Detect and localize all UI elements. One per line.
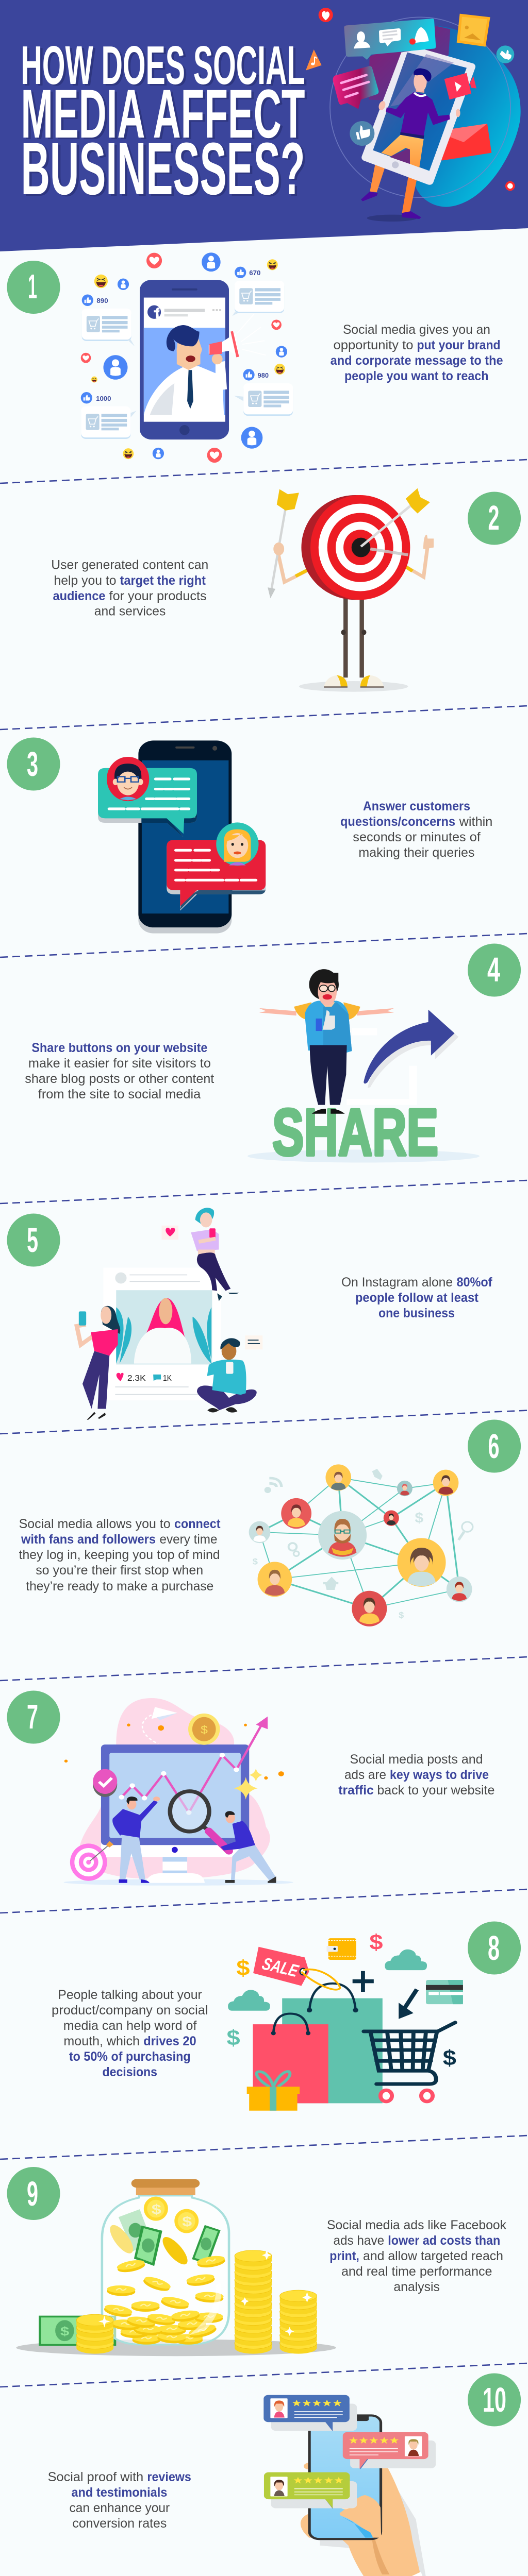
text block 3: making their queries bbox=[358, 845, 474, 860]
illustration: phone with megaphone man and social reactions: 1000 bbox=[96, 395, 111, 402]
text block 7 bbox=[338, 1752, 494, 1798]
text block 1: opportunity to bbox=[333, 338, 414, 352]
text block 10: reviews bbox=[147, 2470, 191, 2484]
panel: step 4 bbox=[25, 944, 521, 1170]
number badge 4 bbox=[468, 944, 521, 996]
illustration: phone with megaphone man and social reactions: 670 bbox=[249, 269, 261, 277]
text block 9: print, bbox=[329, 2249, 359, 2263]
panel: step 5 bbox=[7, 1208, 492, 1420]
text block 4: share blog posts or other content bbox=[25, 1072, 214, 1086]
text block 7: traffic bbox=[338, 1783, 374, 1798]
text block 4: from the site to social media bbox=[38, 1087, 201, 1101]
illustration: jar of money with coin stacks bbox=[16, 2179, 336, 2356]
illustration: target with arrows bbox=[268, 488, 434, 692]
illustration: monitor with analytics: $ bbox=[201, 1723, 208, 1736]
text block 4 bbox=[25, 1041, 214, 1101]
panel: step 1 bbox=[7, 252, 503, 463]
number badge 10: 10 bbox=[483, 2381, 506, 2419]
illustration: shopping bags and cart: $ bbox=[369, 1930, 383, 1954]
header background bbox=[0, 0, 528, 251]
number badge 7: 7 bbox=[27, 1698, 38, 1736]
text block 3 bbox=[340, 799, 492, 860]
text block 5: one business bbox=[378, 1306, 455, 1320]
illustration: shopping bags and cart: SALE bbox=[260, 1954, 301, 1981]
panel: step 6 bbox=[19, 1420, 521, 1626]
number badge 2: 2 bbox=[488, 499, 499, 537]
illustration: instagram post with three people: 2.3K bbox=[127, 1374, 146, 1383]
panel: step 3 bbox=[7, 738, 492, 934]
illustration: shopping bags and cart bbox=[226, 1930, 463, 2111]
number badge 9 bbox=[7, 2167, 60, 2220]
number badge 1: 1 bbox=[28, 267, 37, 306]
panel: step 8 bbox=[52, 1922, 521, 2111]
illustration: jar of money with coin stacks: $ bbox=[182, 2214, 192, 2229]
text block 6: connect bbox=[174, 1517, 221, 1531]
text block 5: 80%of bbox=[457, 1275, 492, 1290]
text block 6 bbox=[19, 1517, 221, 1594]
text block 10: Social proof with bbox=[48, 2470, 143, 2484]
text block 8: mouth, which bbox=[63, 2034, 140, 2048]
illustration: network of people bbox=[249, 1464, 473, 1626]
text block 2: and services bbox=[94, 604, 166, 619]
number badge 5: 5 bbox=[27, 1221, 38, 1260]
text block 1: put your brand bbox=[417, 338, 500, 352]
number badge 3: 3 bbox=[27, 745, 38, 784]
illustration: instagram post with three people bbox=[77, 1208, 262, 1420]
text block 6: so you’re their first stop when bbox=[36, 1563, 203, 1578]
title bbox=[21, 35, 307, 212]
illustration: hand holding phone with reviews bbox=[263, 2395, 439, 2576]
text block 8: People talking about your bbox=[58, 1988, 202, 2002]
text block 9: analysis bbox=[393, 2280, 440, 2294]
text block 9 bbox=[327, 2218, 506, 2294]
text block 8: media can help word of bbox=[63, 2019, 196, 2033]
text block 2: audience bbox=[53, 589, 106, 603]
text block 6: Social media allows you to bbox=[19, 1517, 171, 1531]
text block 4: Share buttons on your website bbox=[31, 1041, 207, 1055]
text block 2 bbox=[51, 557, 208, 619]
text block 9: Social media ads like Facebook bbox=[327, 2218, 506, 2232]
number badge 8 bbox=[468, 1922, 521, 1974]
text block 8: decisions bbox=[102, 2065, 157, 2079]
text block 3: within bbox=[459, 815, 492, 829]
illustration: instagram post with three people: 1K bbox=[163, 1374, 172, 1383]
text block 8: product/company on social bbox=[52, 2003, 208, 2018]
panel: step 7 bbox=[7, 1691, 494, 1886]
text block 9: lower ad costs than bbox=[388, 2233, 500, 2248]
text block 6: with fans and followers bbox=[21, 1532, 156, 1547]
text block 2: target the right bbox=[120, 573, 206, 588]
illustration: phone with megaphone man and social reactions: 980 bbox=[258, 371, 269, 379]
text block 8 bbox=[52, 1988, 208, 2079]
illustration: phone with megaphone man and social reactions bbox=[81, 252, 293, 463]
text block 5: On Instagram alone bbox=[341, 1275, 453, 1290]
number badge 6 bbox=[468, 1420, 521, 1472]
text block 4: make it easier for site visitors to bbox=[28, 1056, 211, 1071]
text block 6: they log in, keeping you top of mind bbox=[19, 1548, 220, 1562]
title: MEDIA AFFECT bbox=[23, 77, 307, 154]
text block 10: conversion rates bbox=[72, 2516, 167, 2531]
text block 1: and corporate message to the bbox=[331, 353, 503, 368]
text block 2: help you to bbox=[54, 573, 117, 588]
text block 2: for your products bbox=[109, 589, 207, 603]
illustration: network of people: $ bbox=[399, 1610, 404, 1620]
illustration: network of people: $ bbox=[415, 1511, 423, 1526]
illustration: shopping bags and cart: $ bbox=[226, 2026, 240, 2050]
illustration: phone with chat bubbles bbox=[98, 740, 266, 934]
number badge 8: 8 bbox=[488, 1929, 500, 1968]
text block 7: ads are bbox=[344, 1768, 386, 1782]
number badge 3 bbox=[7, 738, 60, 790]
hero illustration: man stepping out of tablet bbox=[306, 8, 521, 222]
panel: step 2 bbox=[51, 488, 521, 692]
text block 3: seconds or minutes of bbox=[353, 830, 481, 844]
text block 1 bbox=[331, 323, 503, 383]
illustration: shopping bags and cart: $ bbox=[443, 2046, 456, 2070]
number badge 6: 6 bbox=[488, 1427, 499, 1466]
text block 1: people you want to reach bbox=[344, 369, 489, 383]
number badge 4: 4 bbox=[487, 951, 500, 989]
illustration: man and share arrow bbox=[259, 969, 458, 1114]
text block 8: to 50% of purchasing bbox=[69, 2049, 191, 2064]
illustration: jar of money with coin stacks: $ bbox=[152, 2202, 161, 2217]
text block 8: drives 20 bbox=[143, 2034, 196, 2048]
text block 5 bbox=[341, 1275, 492, 1320]
text block 9: ads have bbox=[333, 2233, 384, 2248]
number badge 1 bbox=[7, 261, 60, 314]
text block 9: and allow targeted reach bbox=[363, 2249, 503, 2263]
number badge 2 bbox=[468, 492, 521, 545]
illustration: phone with megaphone man and social reactions: 890 bbox=[96, 297, 108, 304]
text block 7: back to your website bbox=[377, 1783, 494, 1798]
header panel bbox=[0, 0, 528, 251]
panel: step 10 bbox=[48, 2373, 521, 2576]
illustration: network of people: $ bbox=[253, 1556, 258, 1566]
text block 3: questions/concerns bbox=[340, 815, 455, 829]
text block 10: can enhance your bbox=[69, 2501, 170, 2515]
text block 5: people follow at least bbox=[355, 1291, 479, 1305]
illustration: monitor with analytics bbox=[63, 1698, 293, 1886]
number badge 5 bbox=[7, 1214, 60, 1266]
illustration: jar of money with coin stacks: $ bbox=[60, 2324, 70, 2338]
ground shadow bbox=[248, 1150, 480, 1162]
text block 10 bbox=[48, 2470, 191, 2531]
number badge 9: 9 bbox=[27, 2175, 38, 2213]
text block 3: Answer customers bbox=[363, 799, 470, 814]
number badge 7 bbox=[7, 1691, 60, 1743]
text block 6: every time bbox=[160, 1532, 218, 1547]
illustration: shopping bags and cart: $ bbox=[236, 1956, 250, 1980]
text block 7: Social media posts and bbox=[350, 1752, 483, 1767]
text block 9: and real time performance bbox=[341, 2264, 492, 2279]
panel: step 9 bbox=[7, 2167, 506, 2356]
text block 2: User generated content can bbox=[51, 557, 208, 572]
number badge 10 bbox=[468, 2373, 521, 2427]
text block 10: and testimonials bbox=[71, 2485, 167, 2500]
text block 7: key ways to drive bbox=[390, 1768, 489, 1782]
text block 6: they’re ready to make a purchase bbox=[26, 1579, 213, 1594]
share word: SHARE bbox=[272, 1096, 438, 1170]
title: MEDIA AFFECT bbox=[21, 76, 305, 152]
text block 1: Social media gives you an bbox=[343, 323, 490, 337]
